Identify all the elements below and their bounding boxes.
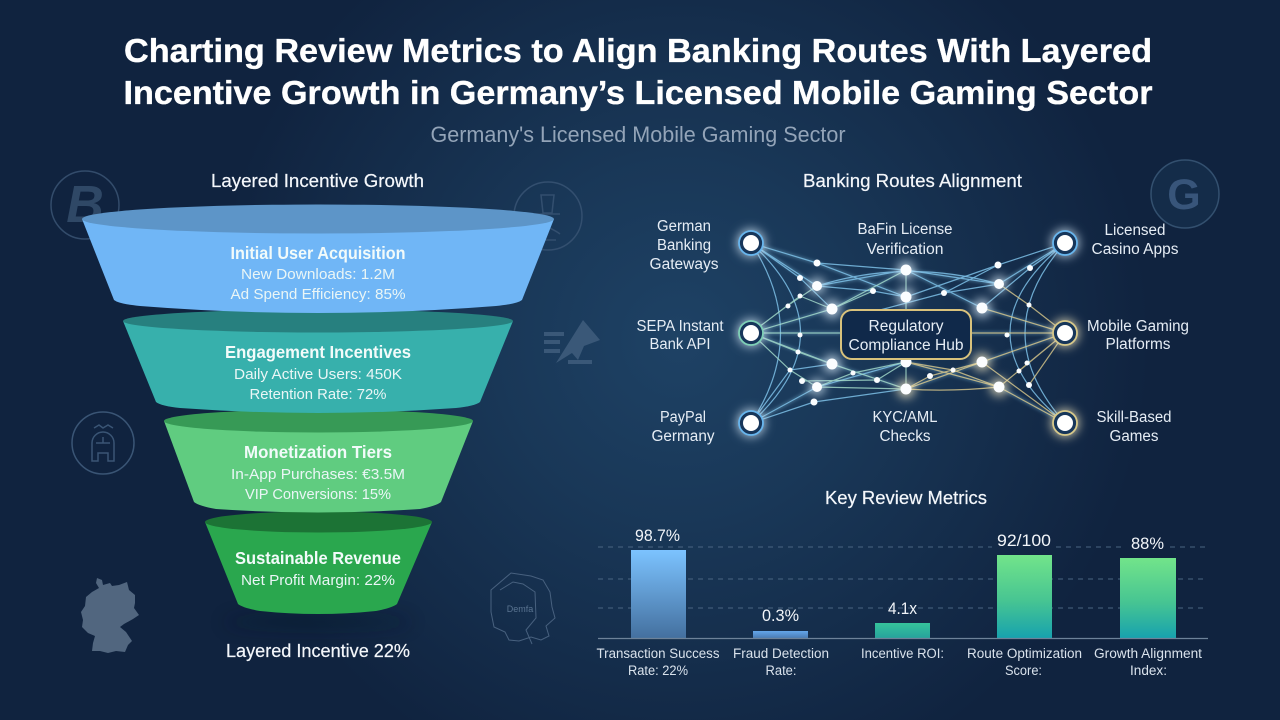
bar: route optimization: Score: <box>1005 663 1042 678</box>
compliance hub: Regulatory <box>868 318 944 335</box>
label: BaFin License Verification <box>858 221 952 258</box>
icon: letter G badge <box>1151 160 1219 228</box>
bar: fraud detection: 0.3% <box>762 607 799 625</box>
funnel tier: engagement incentives <box>123 310 513 413</box>
icon: robot clock badge <box>72 412 134 474</box>
label: Mobile Gaming Platforms: Mobile Gaming <box>1087 318 1189 335</box>
icon: letter B badge: B <box>66 176 104 234</box>
label: SEPA Instant Bank API: SEPA Instant <box>636 318 724 335</box>
label: German Banking Gateways: Gateways <box>650 256 719 273</box>
network diagram <box>636 218 1189 445</box>
compliance hub <box>841 310 971 359</box>
bar: transaction success: Rate: 22% <box>628 663 688 678</box>
subtitle: Germany's Licensed Mobile Gaming Sector <box>430 122 846 147</box>
heading: key metrics: Key Review Metrics <box>825 488 987 508</box>
label: PayPal Germany: Germany <box>652 428 715 445</box>
label: German Banking Gateways: Banking <box>657 237 711 254</box>
label: German Banking Gateways: German <box>657 218 711 235</box>
bar: growth alignment: 88% <box>1131 535 1164 553</box>
heading: banking routes: Banking Routes Alignment <box>803 171 1022 191</box>
compliance hub: Compliance Hub <box>848 337 964 354</box>
funnel caption: Layered Incentive 22% <box>226 641 410 661</box>
icon: paper plane lines <box>544 320 600 364</box>
network small nodes <box>786 260 1033 406</box>
bar: route optimization: Route Optimization <box>967 646 1082 661</box>
bar: incentive ROI: 4.1x <box>888 600 918 618</box>
funnel tier: initial user acquisition: Ad Spend Efficiency: 85% <box>230 286 406 303</box>
bar: fraud detection: Rate: <box>766 663 796 678</box>
funnel tier: engagement incentives: Daily Active Users: 450K <box>234 366 402 383</box>
label: Licensed Casino Apps: Casino Apps <box>1092 241 1179 258</box>
bar: growth alignment: Growth Alignment <box>1094 646 1202 661</box>
label: Licensed Casino Apps <box>1092 222 1179 258</box>
label: German Banking Gateways <box>650 218 719 273</box>
label: SEPA Instant Bank API: Bank API <box>650 336 710 353</box>
funnel tier: initial user acquisition: Initial User Acquisition <box>230 243 406 263</box>
bar chart <box>596 527 1208 678</box>
node: PayPal Germany <box>739 411 763 435</box>
icon: gaming tool badge <box>514 182 582 250</box>
label: Mobile Gaming Platforms <box>1087 318 1189 353</box>
label: Skill-Based Games <box>1096 409 1172 445</box>
title: Incentive Growth in Germany’s Licensed Mobile Gaming Sector <box>124 74 1153 111</box>
bar: growth alignment: Index: <box>1130 663 1167 678</box>
funnel tier: monetization tiers: In-App Purchases: €3.5M <box>231 466 405 483</box>
funnel tier: monetization tiers: Monetization Tiers <box>244 442 392 462</box>
funnel tier: initial user acquisition <box>82 204 554 313</box>
funnel tier: monetization tiers: VIP Conversions: 15% <box>245 486 391 503</box>
node: German Banking Gateways <box>739 231 763 255</box>
bar: transaction success: 98.7% <box>635 527 680 545</box>
funnel chart <box>82 204 554 628</box>
label: SEPA Instant Bank API <box>636 318 724 353</box>
node: Mobile Gaming Platforms <box>1053 321 1077 345</box>
bar: fraud detection: Fraud Detection <box>733 646 829 661</box>
label: BaFin License Verification: Verification <box>866 241 944 258</box>
funnel tier: initial user acquisition: New Downloads: 1.2M <box>241 266 395 283</box>
bar: route optimization: 92/100 <box>997 532 1051 550</box>
icon: letter B badge <box>51 171 119 239</box>
bar: transaction success <box>596 527 720 678</box>
label: Skill-Based Games: Skill-Based <box>1096 409 1172 426</box>
network link glow <box>751 243 1065 423</box>
label: PayPal Germany: PayPal <box>660 409 706 426</box>
label: BaFin License Verification: BaFin License <box>858 221 952 238</box>
funnel tier: engagement incentives: Engagement Incentives <box>225 342 411 362</box>
node: Licensed Casino Apps <box>1053 231 1077 255</box>
bar: fraud detection <box>733 607 829 678</box>
bar: transaction success: Transaction Success <box>596 646 720 661</box>
label: KYC/AML Checks: Checks <box>880 428 931 445</box>
bar: route optimization <box>967 532 1082 678</box>
heading: funnel: Layered Incentive Growth <box>211 171 424 191</box>
icon: Germany outline map: Demfa <box>507 604 533 614</box>
funnel tier: sustainable revenue: Net Profit Margin: 22% <box>241 572 395 589</box>
title <box>124 32 1153 111</box>
label: Mobile Gaming Platforms: Platforms <box>1106 336 1171 353</box>
bar: growth alignment <box>1094 535 1202 678</box>
funnel tier: sustainable revenue <box>205 512 432 628</box>
label: Licensed Casino Apps: Licensed <box>1104 222 1166 239</box>
funnel tier: sustainable revenue: Sustainable Revenue <box>235 548 401 568</box>
node: Skill-Based Games <box>1053 411 1077 435</box>
network links <box>751 243 1065 423</box>
icon: letter G badge: G <box>1167 171 1201 219</box>
network glow halos <box>737 229 1079 437</box>
icon: Germany outline map <box>491 573 555 644</box>
label: Skill-Based Games: Games <box>1110 428 1159 445</box>
node: SEPA Instant Bank API <box>739 321 763 345</box>
bar: incentive ROI <box>861 600 944 661</box>
title: Charting Review Metrics to Align Banking Routes With Layered <box>124 32 1152 69</box>
label: KYC/AML Checks <box>872 409 938 445</box>
icon: Germany silhouette <box>81 578 139 653</box>
funnel tier: monetization tiers <box>164 410 473 512</box>
bar: incentive ROI: Incentive ROI: <box>861 646 944 661</box>
label: PayPal Germany <box>652 409 715 445</box>
label: KYC/AML Checks: KYC/AML <box>872 409 938 426</box>
funnel tier: engagement incentives: Retention Rate: 72% <box>250 386 386 403</box>
